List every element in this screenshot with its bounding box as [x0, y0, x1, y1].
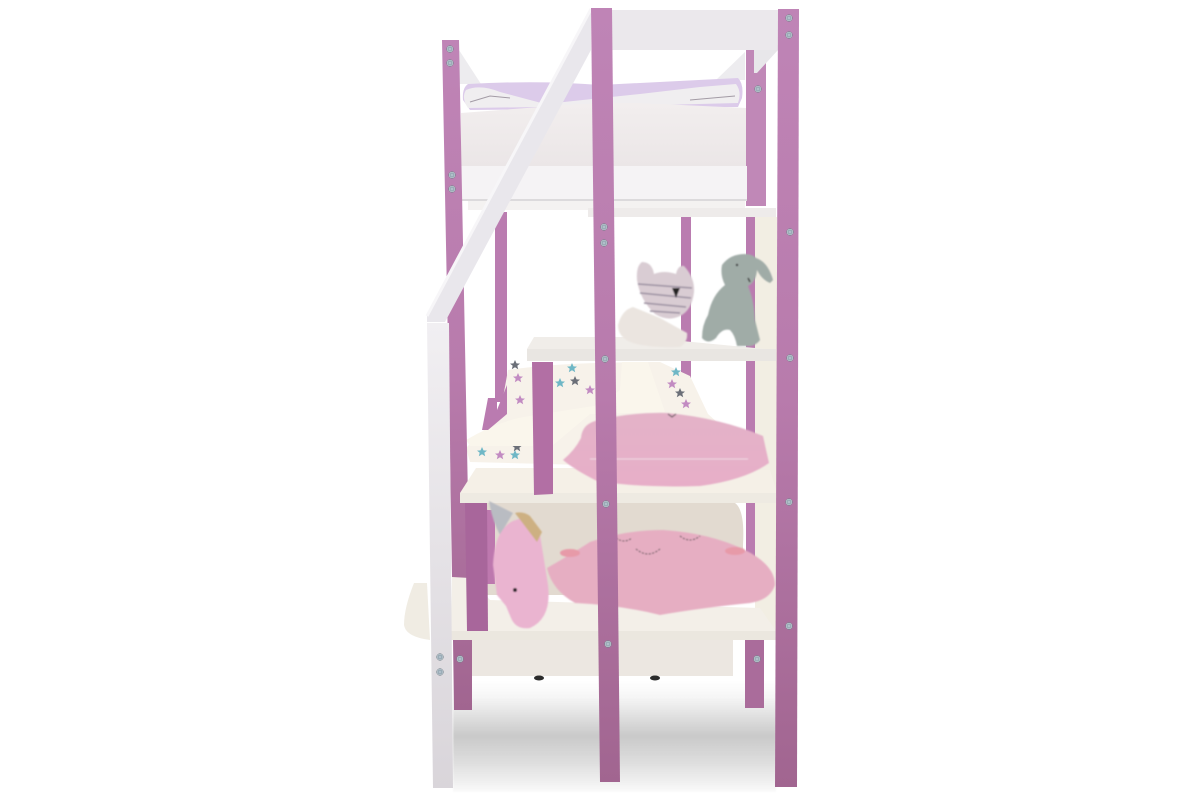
- unicorn toy: [489, 501, 549, 628]
- rear left post: [442, 40, 472, 710]
- front right post: [775, 9, 799, 787]
- lower bed end frame: [482, 385, 507, 430]
- lower bedding with stars: [466, 360, 770, 470]
- short post upper: [532, 362, 553, 495]
- star shaped cushion: [547, 530, 775, 615]
- front center post: [591, 8, 620, 782]
- bottom shelf: [404, 577, 776, 640]
- back panel of shelves: [755, 217, 777, 640]
- pink cushion: [563, 413, 769, 486]
- middle lower shelf: [460, 468, 776, 503]
- upper bedding roll: [463, 78, 742, 110]
- top step: [588, 208, 776, 217]
- upper bed triangle supports: [459, 50, 778, 84]
- lower pink panel: [467, 510, 495, 584]
- short post lower: [465, 503, 488, 631]
- floor shadow: [453, 680, 776, 792]
- bolts: [437, 15, 793, 675]
- pull-out drawer: [470, 640, 733, 680]
- back posts: [495, 50, 766, 708]
- upper bed rail: [461, 166, 747, 210]
- bunny toy: [702, 254, 773, 346]
- top white rail: [612, 10, 778, 50]
- front white staircase post: [427, 323, 453, 788]
- upper mattress: [461, 103, 746, 166]
- staircase diagonal handrail: [427, 9, 591, 322]
- lower mattress: [485, 503, 743, 595]
- short shelf: [527, 337, 776, 361]
- cat toy: [618, 262, 694, 347]
